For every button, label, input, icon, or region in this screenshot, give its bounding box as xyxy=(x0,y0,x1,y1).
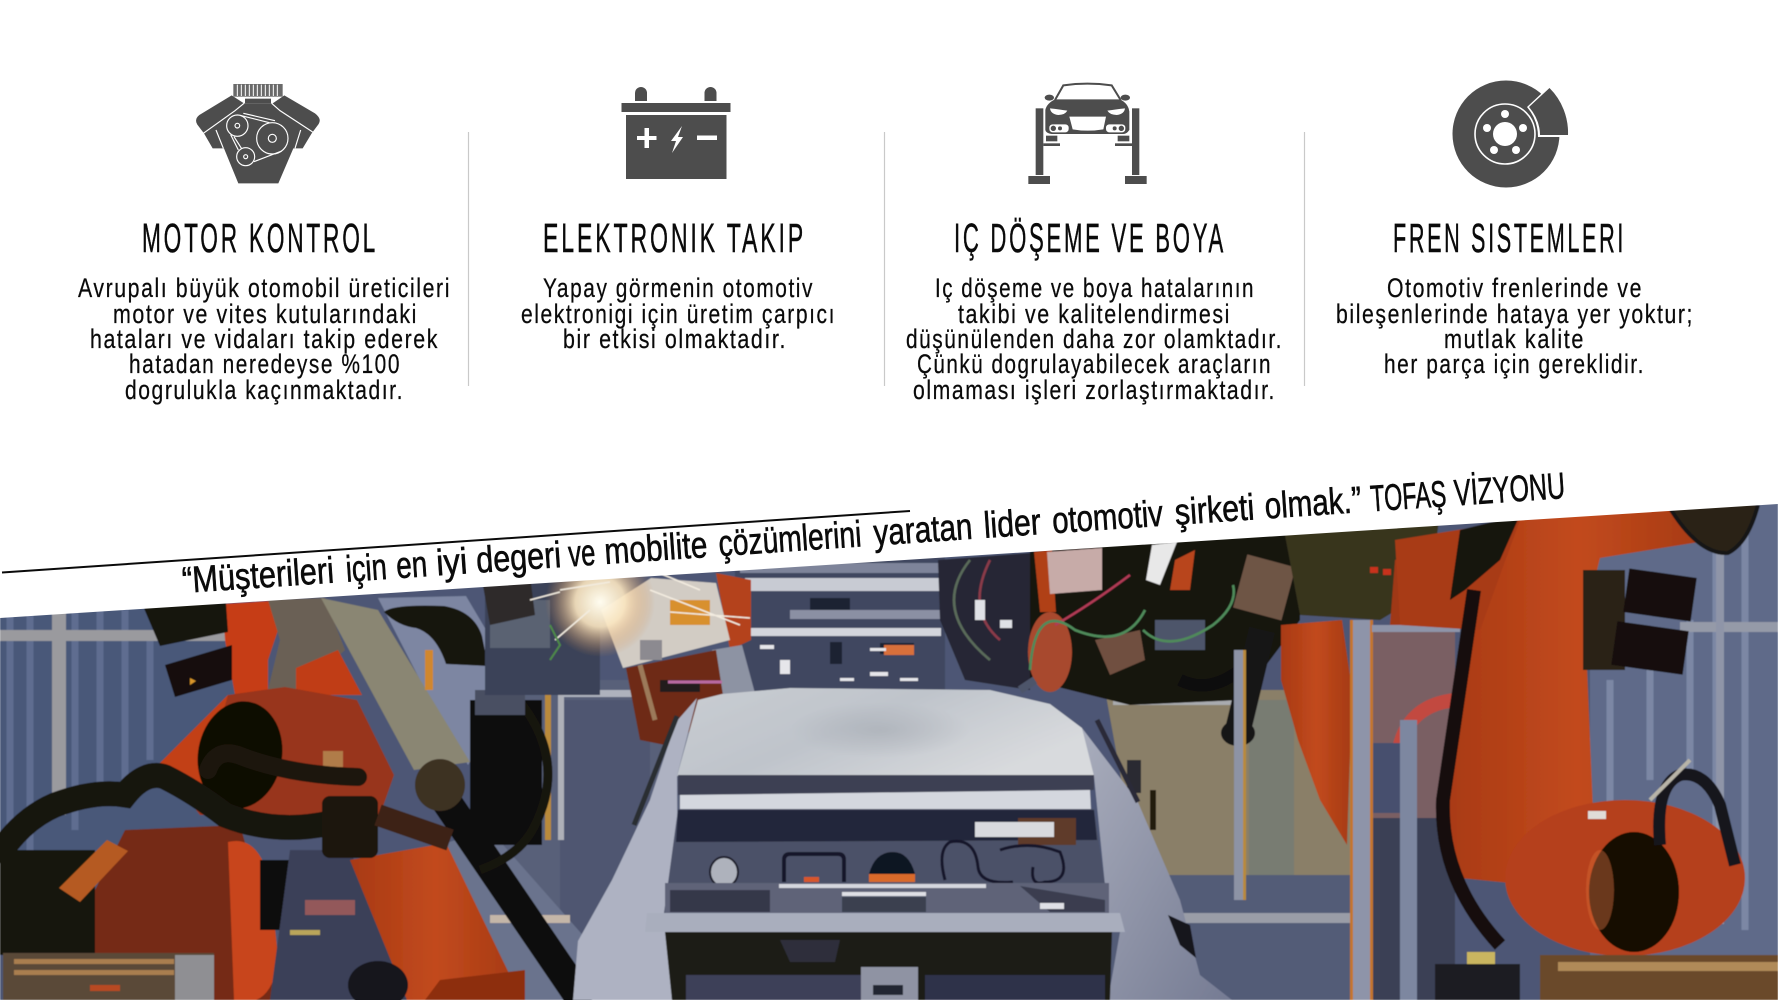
panel: motor kontrol xyxy=(78,84,451,405)
vision quote: mobilite xyxy=(603,524,709,572)
heading: ic doseme ve boya: IÇ DÖŞEME VE BOYA xyxy=(954,215,1226,261)
right robot xyxy=(1449,511,1696,884)
vision quote: için xyxy=(344,546,388,590)
factory photo with robots and car body xyxy=(0,500,1778,1000)
text: ic doseme ve boya description: olmaması işleri zorlaştırmaktadır. xyxy=(913,375,1276,405)
text: ic doseme ve boya description: düşünülenden daha zor olamktadır. xyxy=(906,324,1283,354)
text: motor kontrol description: hataları ve vidaları takip ederek xyxy=(90,324,439,354)
text: ic doseme ve boya description: takibi ve kalitelendirmesi xyxy=(958,299,1231,329)
left robot xyxy=(224,600,278,695)
panel: elektronik takip xyxy=(521,87,836,354)
left pillar xyxy=(573,698,697,1000)
back of the line xyxy=(735,555,945,700)
vision quote: VİZYONU xyxy=(1453,465,1566,514)
icon: brake disc xyxy=(1452,80,1570,188)
slanted black rule xyxy=(2,511,910,572)
right pillar xyxy=(1082,728,1232,1000)
divider lines xyxy=(468,132,1304,386)
car body xyxy=(573,688,1232,1000)
engine bay xyxy=(678,775,1094,795)
text: elektronik takip description: elektronigi için üretim çarpıcı xyxy=(521,299,836,329)
text: fren sistemleri description: bileşenlerinde hataya yer yoktur; xyxy=(1336,299,1694,329)
vision quote: çözümlerini xyxy=(717,513,863,564)
vision quote: degeri xyxy=(475,534,562,581)
heading: elektronik takip: ELEKTRONIK TAKIP xyxy=(543,215,806,261)
vision quote xyxy=(181,465,1566,601)
text: motor kontrol description: hatadan neredeyse %100 xyxy=(129,349,401,379)
welding panel with sparks xyxy=(485,575,600,695)
vision quote: lider xyxy=(982,501,1042,546)
heading: motor kontrol: MOTOR KONTROL xyxy=(142,215,378,261)
text: fren sistemleri description xyxy=(1336,273,1694,379)
text: elektronik takip description: bir etkisi olmaktadır. xyxy=(563,324,787,354)
vision quote: şirketi xyxy=(1173,486,1256,533)
text: motor kontrol description: Avrupalı büyük otomobil üreticileri xyxy=(78,273,451,303)
text: motor kontrol description: motor ve vites kutularındaki xyxy=(113,299,418,329)
crossbar xyxy=(645,913,1125,932)
middle background xyxy=(504,680,680,908)
icon: battery xyxy=(622,87,730,179)
roof xyxy=(677,688,1096,776)
lower robot body xyxy=(94,825,273,1000)
vision quote: en xyxy=(395,543,428,586)
vision quote: olmak.” xyxy=(1263,479,1363,527)
tan window xyxy=(1105,690,1360,878)
text: elektronik takip description xyxy=(521,273,836,354)
vision quote: otomotiv xyxy=(1051,493,1165,541)
text: ic doseme ve boya description: Çünkü dogrulayabilecek araçların xyxy=(917,349,1272,379)
text: ic doseme ve boya description xyxy=(906,273,1283,405)
vision quote: ve xyxy=(567,532,597,574)
panel: fren sistemleri xyxy=(1336,80,1694,379)
vision quote: yaratan xyxy=(872,506,974,553)
text: elektronik takip description: Yapay görmenin otomotiv xyxy=(543,273,814,303)
hoses xyxy=(208,753,358,777)
text: ic doseme ve boya description: Iç döşeme ve boya hatalarının xyxy=(935,273,1255,303)
vision quote: iyi xyxy=(435,540,469,584)
text: fren sistemleri description: mutlak kalite xyxy=(1444,324,1585,354)
text: fren sistemleri description: her parça için gereklidir. xyxy=(1384,349,1645,379)
icon: car on lift xyxy=(1028,84,1147,184)
central robot arm and window xyxy=(1284,526,1439,620)
text: motor kontrol description xyxy=(78,273,451,405)
text: fren sistemleri description: Otomotiv frenlerinde ve xyxy=(1387,273,1643,303)
panel: ic doseme ve boya xyxy=(906,84,1283,405)
crates and floor machines xyxy=(3,953,214,1000)
long arm and cable xyxy=(350,843,521,1000)
welding tools cluster xyxy=(938,553,1030,690)
icon: engine xyxy=(196,84,320,183)
vision quote: TOFAŞ xyxy=(1369,473,1448,519)
text: motor kontrol description: dogrulukla kaçınmaktadır. xyxy=(125,375,404,405)
vision quote: “Müşterileri xyxy=(181,550,335,601)
